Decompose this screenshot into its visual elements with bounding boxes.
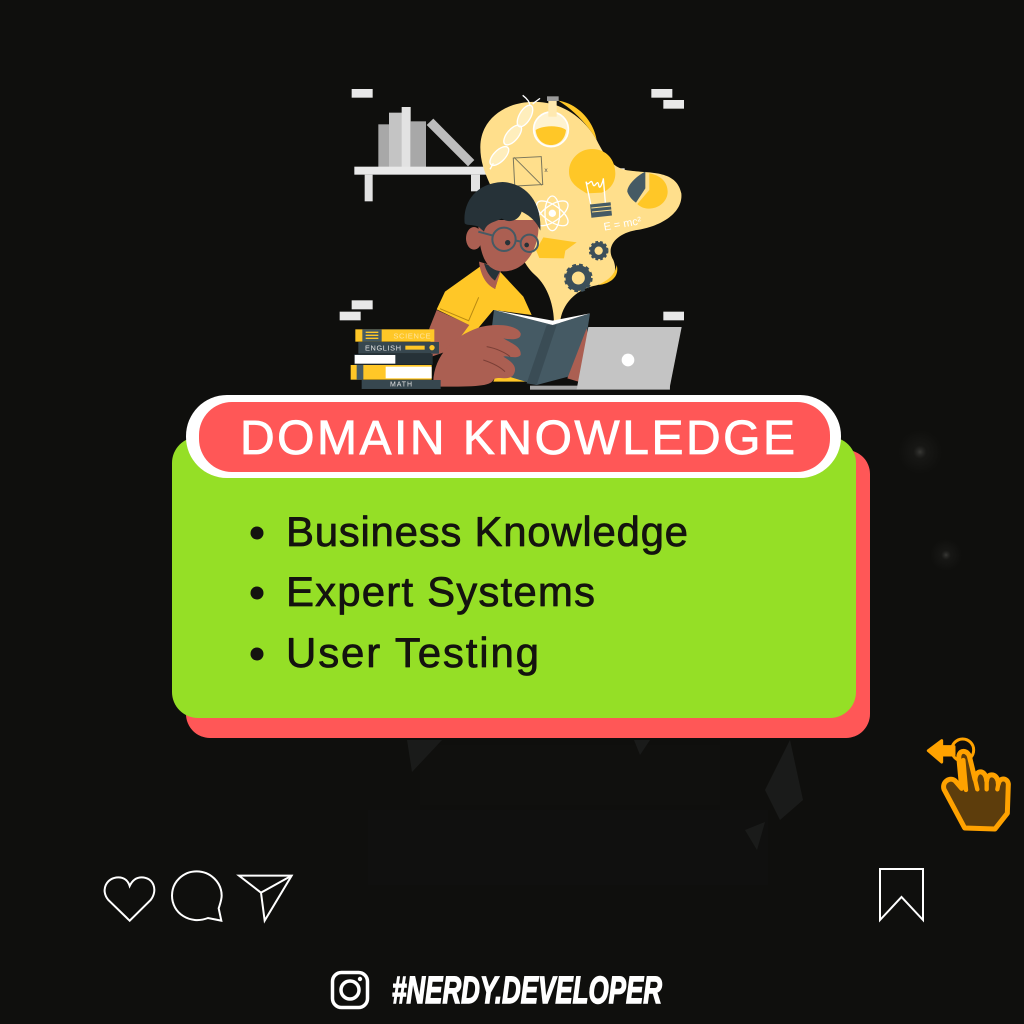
pie chart bbox=[627, 172, 668, 209]
reading hand bbox=[433, 325, 521, 387]
icon: send bbox=[239, 876, 292, 921]
panel: red shadow card bbox=[186, 450, 870, 738]
dna bbox=[487, 95, 540, 169]
hashtag: #NERDY.DEVELOPER bbox=[392, 970, 662, 1012]
item: business knowledge: Business Knowledge bbox=[286, 508, 688, 555]
stack of books: SCIENCE bbox=[393, 332, 431, 341]
gears bbox=[566, 242, 607, 291]
square diagram bbox=[513, 157, 543, 186]
formula: E = mc² bbox=[603, 215, 643, 234]
social action icons bbox=[105, 871, 292, 921]
heading: DOMAIN KNOWLEDGE bbox=[240, 412, 795, 465]
icon: instagram bbox=[332, 972, 368, 1008]
illustration: student reading with idea cloud: x bbox=[544, 167, 548, 174]
idea cloud bbox=[480, 102, 681, 323]
title pill bbox=[186, 395, 841, 478]
bullet list bbox=[250, 508, 688, 676]
flask bbox=[534, 96, 568, 147]
footer handle bbox=[332, 970, 662, 1012]
icon: heart bbox=[105, 877, 154, 921]
stack of books: ENGLISH bbox=[365, 343, 401, 352]
wall bricks bbox=[340, 89, 684, 320]
stack of books bbox=[351, 329, 441, 389]
illustration: student reading with idea cloud bbox=[340, 89, 684, 390]
item: user testing: User Testing bbox=[286, 629, 539, 676]
atom bbox=[533, 196, 572, 231]
stack of books: MATH bbox=[390, 382, 412, 389]
bookshelf bbox=[354, 107, 488, 201]
student bbox=[429, 182, 590, 387]
open book bbox=[487, 310, 590, 385]
item: expert systems: Expert Systems bbox=[286, 568, 595, 615]
panel: green content card bbox=[172, 437, 856, 718]
icon: bookmark bbox=[880, 869, 923, 920]
light bulb bbox=[569, 149, 615, 218]
laptop bbox=[530, 327, 682, 390]
graduation cap bbox=[536, 237, 577, 258]
icon: comment bbox=[172, 871, 222, 921]
icon: swipe hand bbox=[928, 739, 1008, 829]
